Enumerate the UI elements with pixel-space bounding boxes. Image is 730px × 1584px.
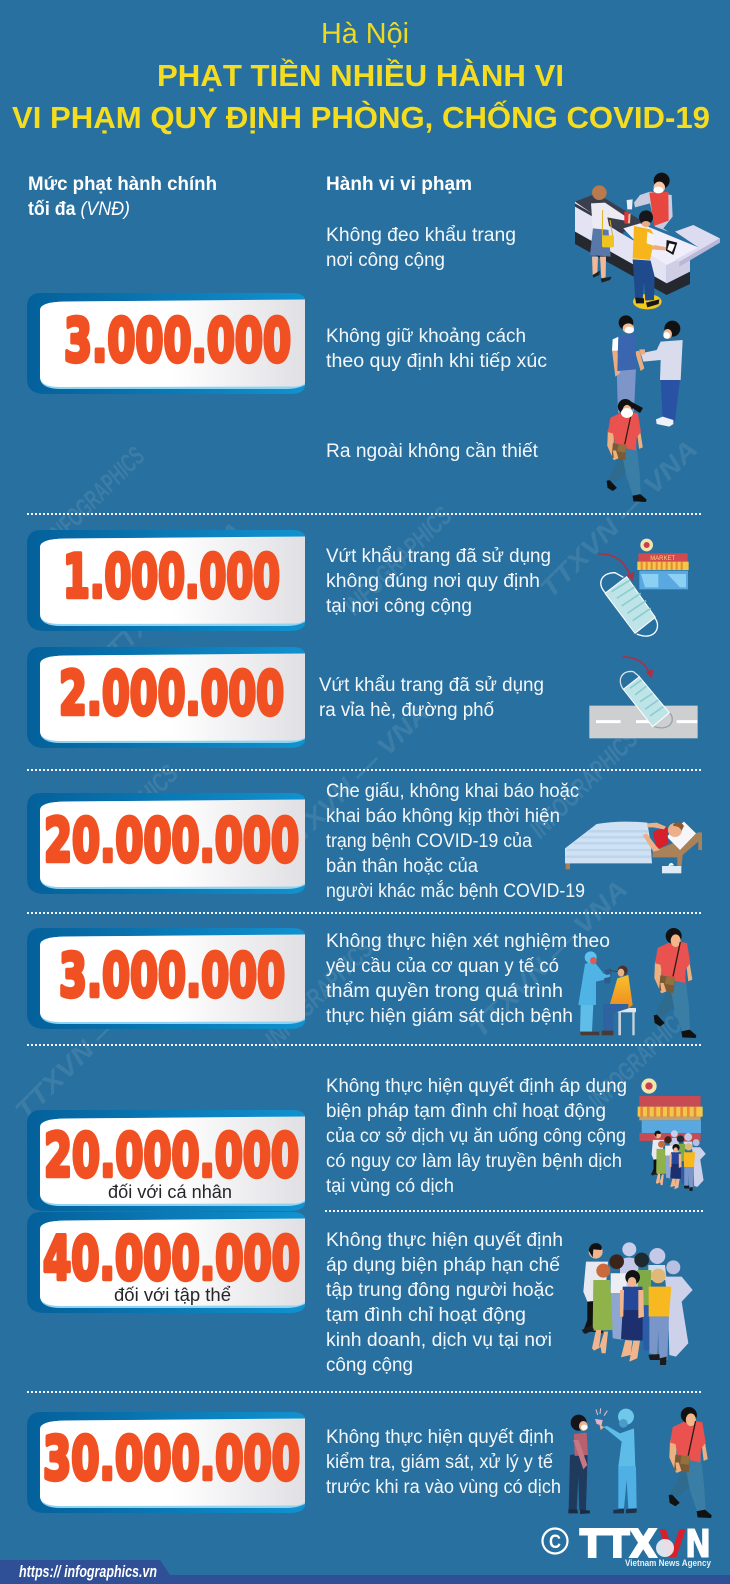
violation text: no mask	[326, 225, 516, 271]
violation text: refuse inspection: kiểm tra, giám sát, xử lý y tế	[326, 1452, 553, 1473]
banner: 40.000.000 collective: 40.000.000	[43, 1224, 300, 1294]
violation text: suspend food service	[326, 1076, 627, 1197]
banner: 40.000.000 collective	[27, 1212, 305, 1313]
footer band and url	[0, 1560, 730, 1584]
watermarks: TTXVN — VNA	[272, 697, 435, 860]
icon: crowd	[582, 1242, 693, 1365]
violation text: suspend food service: của cơ sở dịch vụ ăn uống công cộng	[326, 1126, 626, 1147]
logo: copyright TTXVN: C	[549, 1532, 561, 1553]
banner: 30.000.000	[27, 1412, 305, 1513]
violation text: hiding disease	[326, 781, 585, 902]
icon: temperature check	[568, 1408, 637, 1514]
watermarks	[9, 434, 703, 1125]
violation text: no testing: thực hiện giám sát dịch bệnh	[326, 1006, 573, 1027]
column heading: fine: Mức phạt hành chính	[28, 174, 217, 195]
violation text: discard mask in public	[326, 546, 551, 617]
violation text: refuse inspection: Không thực hiện quyết định	[326, 1427, 554, 1448]
violation text: distancing: Không giữ khoảng cách	[326, 326, 526, 347]
icon: mask and market	[589, 539, 698, 738]
violation text: discard mask in public: không đúng nơi quy định	[326, 571, 540, 592]
violation text: no testing: thẩm quyền trong quá trình	[326, 981, 563, 1002]
icon: walking man	[669, 1407, 712, 1518]
violation text: going out: Ra ngoài không cần thiết	[326, 441, 539, 462]
violation text: no testing: Không thực hiện xét nghiệm theo	[326, 931, 610, 952]
title: Hà Nội	[321, 18, 409, 50]
watermarks: INFOGRAPHICS	[64, 758, 184, 879]
watermarks: INFOGRAPHICS	[524, 723, 644, 844]
violation text: limit gatherings	[326, 1230, 563, 1376]
column heading: fine: tối đa (VNĐ)	[28, 199, 130, 220]
footer band and url: https:// infographics.vn	[19, 1562, 157, 1581]
watermarks: INFOGRAPHICS	[41, 441, 151, 550]
violation text: discard mask on street: ra vỉa hè, đường phố	[319, 700, 494, 721]
violation text: suspend food service: biện pháp tạm đình chỉ hoạt động	[326, 1101, 606, 1122]
watermarks: INFOGRAPHICS	[338, 500, 458, 621]
icon: walking man	[654, 928, 696, 1038]
column heading: violation: Hành vi vi phạm	[326, 174, 472, 195]
logo: copyright TTXVN: Vietnam News Agency	[625, 1558, 711, 1568]
banner: 20.000.000 per person	[27, 1110, 305, 1211]
logo: copyright TTXVN: V	[659, 1522, 687, 1566]
logo: copyright TTXVN	[542, 1522, 711, 1568]
watermarks: TTXVN — VNA	[464, 874, 633, 1043]
dotted dividers	[27, 514, 703, 1392]
violation text: suspend food service: tại vùng có dịch	[326, 1176, 454, 1197]
violation text: distancing: theo quy định khi tiếp xúc	[326, 351, 547, 372]
violation text: suspend food service: có nguy cơ làm lây truyền bệnh dịch	[326, 1151, 622, 1172]
logo: copyright TTXVN: TTX	[580, 1522, 657, 1566]
banner: 2.000.000	[27, 647, 305, 748]
violation text: limit gatherings: áp dụng biện pháp hạn chế	[326, 1255, 560, 1276]
icon: two people talking	[612, 315, 683, 427]
violation text: refuse inspection: trước khi ra vào vùng có dịch	[326, 1477, 561, 1498]
banner: 20.000.000 per person: đối với cá nhân	[108, 1181, 232, 1202]
violation text: suspend food service: Không thực hiện quyết định áp dụng	[326, 1076, 627, 1097]
banner: 40.000.000 collective: đối với tập thể	[114, 1284, 231, 1305]
banner: 20.000.000 per person: 20.000.000	[44, 1121, 299, 1191]
banner: 2.000.000: 2.000.000	[59, 659, 284, 729]
banner: 30.000.000: 30.000.000	[43, 1424, 300, 1494]
violation text: discard mask on street	[319, 675, 544, 721]
violation text: no mask: Không đeo khẩu trang	[326, 225, 516, 246]
banner: 20.000.000: 20.000.000	[44, 806, 299, 876]
icon: walking man	[607, 399, 647, 502]
icon: shop and crowd	[638, 1078, 706, 1191]
violation text: limit gatherings: tập trung đông người hoặc	[326, 1280, 554, 1301]
banner: 3.000.000	[27, 928, 305, 1029]
violation text: limit gatherings: kinh doanh, dịch vụ tại nơi	[326, 1330, 552, 1351]
logo: copyright TTXVN: N	[685, 1522, 711, 1566]
icon: mask and market: MARKET	[650, 556, 675, 562]
title: PHẠT TIỀN NHIỀU HÀNH VI	[157, 58, 564, 93]
banner: 3.000.000: 3.000.000	[64, 306, 291, 376]
violation text: no testing: yêu cầu của cơ quan y tế có	[326, 956, 559, 977]
violation text: hiding disease: người khác mắc bệnh COVID-19	[326, 880, 585, 902]
violation text: no mask: nơi công cộng	[326, 250, 445, 271]
violation text: refuse inspection	[326, 1427, 561, 1498]
banner: 3.000.000: 3.000.000	[59, 941, 285, 1011]
violation text: hiding disease: trạng bệnh COVID-19 của	[326, 831, 532, 852]
violation text: hiding disease: khai báo không kịp thời hiện	[326, 806, 560, 827]
violation text: discard mask in public: tại nơi công cộng	[326, 596, 472, 617]
icon: checkout counter	[575, 173, 720, 309]
watermarks: TTXVN — VNA	[534, 434, 703, 603]
title	[12, 18, 710, 135]
watermarks: TTXVN — VNA	[100, 516, 249, 665]
violation text: hiding disease: bản thân hoặc của	[326, 856, 478, 877]
violation text: limit gatherings: Không thực hiện quyết định	[326, 1230, 563, 1251]
violation text: limit gatherings: công cộng	[326, 1355, 413, 1376]
violation text: discard mask in public: Vứt khẩu trang đã sử dụng	[326, 546, 551, 567]
banner: 3.000.000	[27, 293, 305, 394]
violation text: limit gatherings: tạm đình chỉ hoạt động	[326, 1305, 526, 1326]
watermarks: INFOGRAPHICS	[259, 933, 379, 1054]
icon: sick person in bed	[565, 822, 702, 873]
banner: 1.000.000: 1.000.000	[63, 542, 280, 612]
violation text: no testing	[326, 931, 610, 1027]
watermarks: TTXVN — VNA	[9, 956, 178, 1125]
banner: 20.000.000	[27, 793, 305, 894]
column heading: fine	[28, 174, 217, 220]
title: VI PHẠM QUY ĐỊNH PHÒNG, CHỐNG COVID-19	[12, 99, 710, 135]
violation text: hiding disease: Che giấu, không khai báo hoặc	[326, 781, 579, 802]
banner: 1.000.000	[27, 530, 305, 631]
violation text: discard mask on street: Vứt khẩu trang đã sử dụng	[319, 675, 544, 696]
icon: swab test	[578, 951, 636, 1035]
violation text: distancing	[326, 326, 547, 372]
